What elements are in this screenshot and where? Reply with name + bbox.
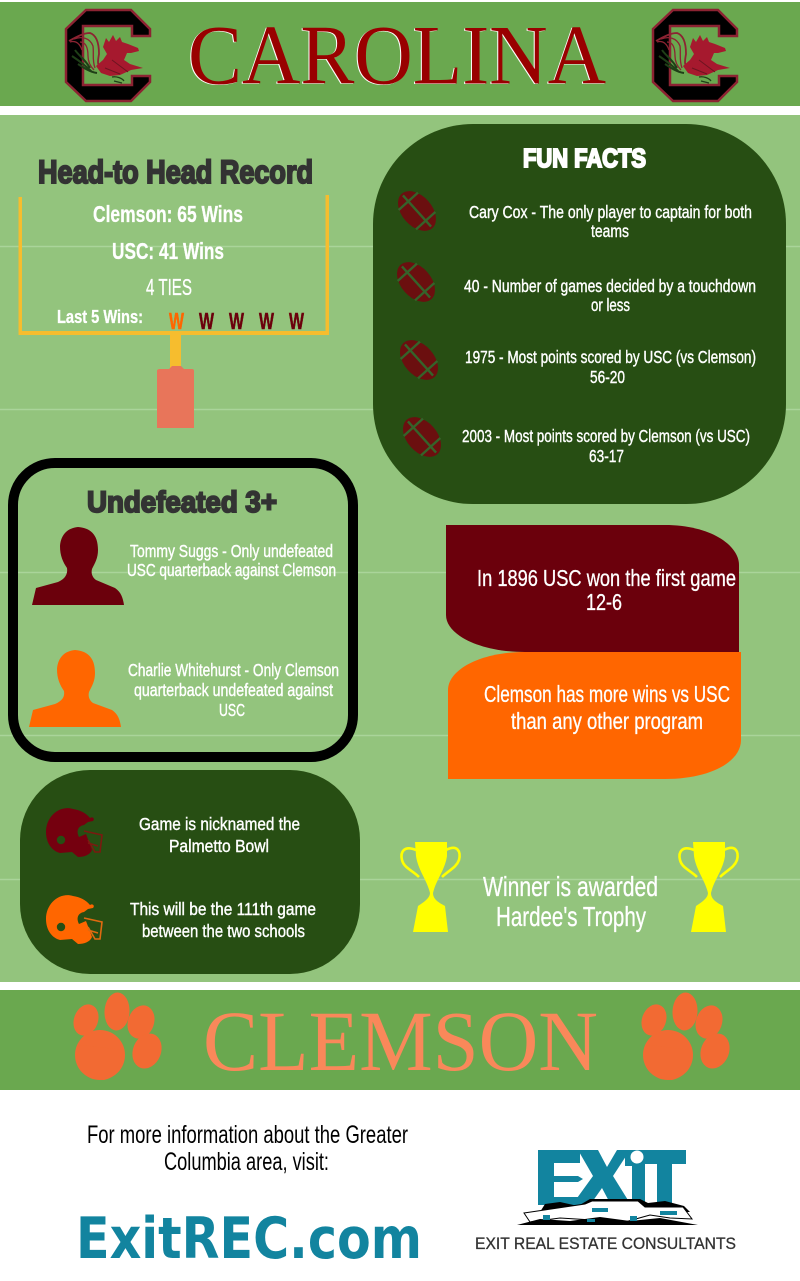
text: Charlie Whitehurst (128, 660, 339, 720)
text: nickname: Palmetto Bowl (169, 836, 269, 856)
callout: more wins: than any other program (511, 708, 703, 734)
icon: Clemson player silhouette (29, 650, 121, 727)
text: more information (87, 1121, 408, 1176)
last five wins markers: W (259, 308, 274, 334)
icon: orange helmet (46, 895, 102, 944)
text: Charlie Whitehurst: Charlie Whitehurst - Only Clemson (128, 660, 339, 680)
text: 111th game (130, 899, 316, 941)
goalpost (18, 195, 329, 428)
fact: 2003 (462, 426, 750, 466)
fact: 2003: 63-17 (589, 446, 624, 466)
text: Clemson wins: Clemson: 65 Wins (93, 201, 243, 227)
last five wins markers: W (229, 308, 244, 334)
icon: football 1 (390, 184, 444, 238)
text: ties: 4 TIES (146, 274, 192, 300)
panel: undefeated (13, 463, 353, 757)
last five wins markers (169, 308, 304, 334)
icon: Carolina logo right (653, 10, 737, 101)
panel: fun facts (373, 124, 786, 504)
fact: Cary Cox (469, 202, 752, 241)
text: nickname: Game is nicknamed the (139, 814, 300, 834)
heading: head to head record: Head-to Head Record (38, 154, 313, 190)
text: USC wins: USC: 41 Wins (112, 238, 224, 264)
callout: first game (446, 525, 739, 652)
banner: Carolina (0, 2, 800, 106)
fact: 1975: 56-20 (590, 367, 625, 387)
title: Carolina shadow: CAROLINA (187, 9, 605, 103)
icon: trophy right (680, 842, 738, 932)
callout: first game: In 1896 USC won the first game (477, 565, 736, 591)
callout: first game: 12-6 (586, 589, 622, 615)
title: Carolina: CAROLINA (188, 8, 606, 102)
icon: paw left (69, 992, 167, 1080)
fact: Cary Cox: teams (591, 221, 629, 241)
text: Charlie Whitehurst: quarterback undefeated against (134, 680, 333, 700)
icon: trophy left (402, 842, 460, 932)
text: logo name: EXIT REAL ESTATE CONSULTANTS (475, 1234, 736, 1253)
text: Hardee's Trophy: Winner is awarded (483, 871, 658, 902)
icon: USC player silhouette (32, 527, 124, 605)
icon: Carolina logo left (66, 10, 150, 101)
text: more information: Columbia area, visit: (164, 1148, 329, 1176)
panel: football field (0, 115, 800, 982)
text: website: ExitREC.com (76, 1206, 422, 1272)
text: Tommy Suggs: USC quarterback against Clemson (127, 560, 336, 580)
title: Clemson: CLEMSON (203, 993, 598, 1089)
icon: paw right (637, 992, 735, 1080)
heading: fun facts: FUN FACTS (523, 143, 646, 173)
panel: game notes (20, 770, 360, 974)
fact: 40 games (464, 276, 756, 315)
banner: Clemson (0, 990, 800, 1090)
text: 111th game: between the two schools (142, 921, 305, 941)
text: Charlie Whitehurst: USC (219, 700, 245, 720)
heading: undefeated: Undefeated 3+ (87, 486, 277, 519)
last five wins markers: W (169, 308, 184, 334)
text: nickname (139, 814, 300, 856)
text: Tommy Suggs (127, 541, 336, 580)
text: Hardee's Trophy: Hardee's Trophy (496, 901, 646, 932)
last five wins markers: W (289, 308, 304, 334)
fact: 1975 (465, 347, 756, 387)
text: more information: For more information about the Greater (87, 1121, 408, 1149)
text: last 5 wins: Last 5 Wins: (57, 307, 143, 327)
icon: football 4 (395, 410, 449, 464)
icon: maroon helmet (46, 808, 102, 857)
callout: more wins (448, 652, 741, 779)
icon: football 2 (389, 255, 443, 309)
logo: Exit Real Estate Consultants (475, 1150, 736, 1253)
icon: football 3 (392, 333, 446, 387)
text: Tommy Suggs: Tommy Suggs - Only undefeated (130, 541, 333, 561)
text: 111th game: This will be the 111th game (130, 899, 316, 919)
text: Hardee's Trophy (483, 871, 658, 932)
last five wins markers: W (199, 308, 214, 334)
fact: 40 games: or less (591, 295, 630, 315)
